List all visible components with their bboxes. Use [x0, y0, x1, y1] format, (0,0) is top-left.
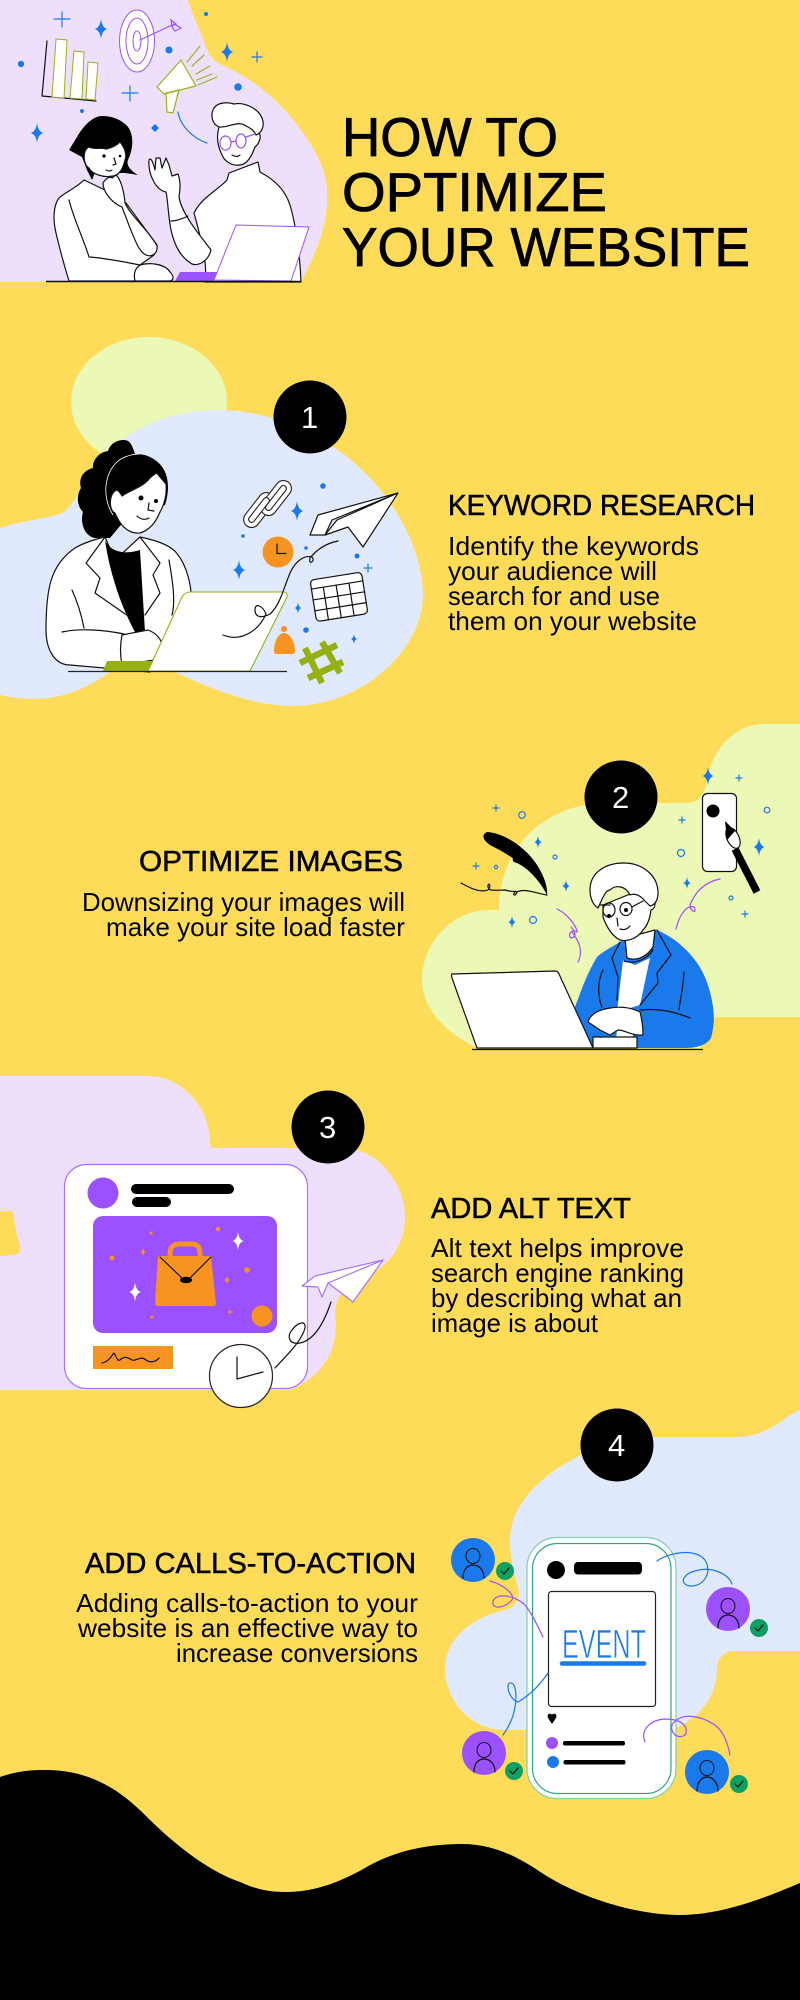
icon: sparkles and circles [473, 767, 770, 928]
body text 2 [82, 887, 405, 942]
icon: person [274, 626, 295, 654]
header lavender blob [0, 0, 327, 282]
body text 3: by describing what an [431, 1283, 682, 1313]
man with glasses [46, 103, 309, 282]
step number 3: 3 [319, 1110, 336, 1145]
body text 1 [448, 531, 699, 636]
icon: calendar [310, 572, 368, 622]
icon: megaphone [157, 46, 217, 113]
event image [548, 1592, 656, 1706]
connector curls [490, 1553, 732, 1755]
lavender blob [0, 1076, 405, 1390]
title: HOW TO [342, 106, 558, 168]
icon: wall clock [210, 1344, 272, 1408]
avatar top right [706, 1587, 768, 1637]
lime blob [422, 724, 800, 1048]
icon: purple curls [557, 879, 720, 962]
avatar top left [451, 1538, 514, 1582]
body text 3: search engine ranking [431, 1258, 684, 1288]
body text 1: search for and use [448, 581, 660, 611]
icon: bar chart [42, 39, 98, 101]
avatar bottom right [685, 1750, 748, 1794]
step number 3 [292, 1090, 364, 1164]
social post card [64, 1164, 308, 1388]
title [342, 106, 750, 278]
icon: target with arrow [120, 10, 181, 72]
woman at laptop [46, 440, 338, 672]
icon: heart [548, 1714, 556, 1724]
body text 3 [431, 1233, 684, 1338]
woman thinking [54, 116, 172, 281]
body text 2: Downsizing your images will [82, 887, 405, 917]
post image with bag [93, 1216, 277, 1333]
body text 1: Identify the keywords [448, 531, 699, 561]
blue blob [0, 410, 423, 706]
body text 4: website is an effective way to [77, 1613, 418, 1643]
title: YOUR WEBSITE [342, 216, 750, 278]
heading: add alt text: ADD ALT TEXT [431, 1193, 631, 1225]
phone mockup [527, 1538, 676, 1798]
heading: keyword research: KEYWORD RESEARCH [448, 490, 755, 522]
heading: add calls-to-action: ADD CALLS-TO-ACTION [85, 1548, 416, 1580]
yellow notch [0, 1211, 20, 1256]
step number 1 [274, 380, 346, 454]
title: OPTIMIZE [342, 161, 607, 223]
icon: header sparkles and dots [18, 12, 262, 143]
icon: paper plane [310, 493, 398, 547]
panel: step 3 add alt text [0, 1076, 684, 1408]
body text 1: them on your website [448, 606, 697, 636]
step number 1: 1 [301, 400, 318, 435]
man at laptop [452, 863, 714, 1050]
step number 4: 4 [608, 1428, 625, 1463]
panel: step 1 keyword research [0, 337, 755, 706]
step number 2 [584, 760, 658, 834]
icon: swirl [275, 1302, 331, 1368]
black wave footer [0, 1770, 800, 2000]
blue blob [445, 1410, 800, 1730]
body text 3: image is about [431, 1308, 599, 1338]
icon: chain links [240, 477, 295, 531]
body text 4: Adding calls-to-action to your [76, 1588, 418, 1618]
step number 2: 2 [612, 780, 629, 815]
icon: image card with brush [702, 794, 757, 892]
icon: feather [461, 832, 547, 895]
panel: step 4 add calls-to-action [76, 1408, 800, 1798]
step number 4 [580, 1408, 654, 1482]
body text 2: make your site load faster [106, 912, 405, 942]
icon: sparkles and dots [233, 483, 372, 644]
heading: optimize images: OPTIMIZE IMAGES [139, 846, 403, 878]
icon: paper plane [302, 1260, 383, 1302]
icon: hashtag [300, 642, 343, 683]
avatar bottom left [462, 1731, 523, 1780]
body text 1: your audience will [448, 556, 657, 586]
lime blob [71, 337, 227, 467]
event image: EVENT [562, 1621, 646, 1667]
icon: blue arc [178, 112, 207, 143]
body text 4: increase conversions [176, 1638, 418, 1668]
body text 3: Alt text helps improve [431, 1233, 684, 1263]
orange label with squiggle [93, 1346, 173, 1369]
panel: step 2 optimize images [82, 724, 800, 1050]
panel: header [0, 0, 750, 282]
body text 4 [76, 1588, 418, 1668]
icon: clock [262, 536, 294, 568]
user avatars with badges [451, 1538, 768, 1794]
